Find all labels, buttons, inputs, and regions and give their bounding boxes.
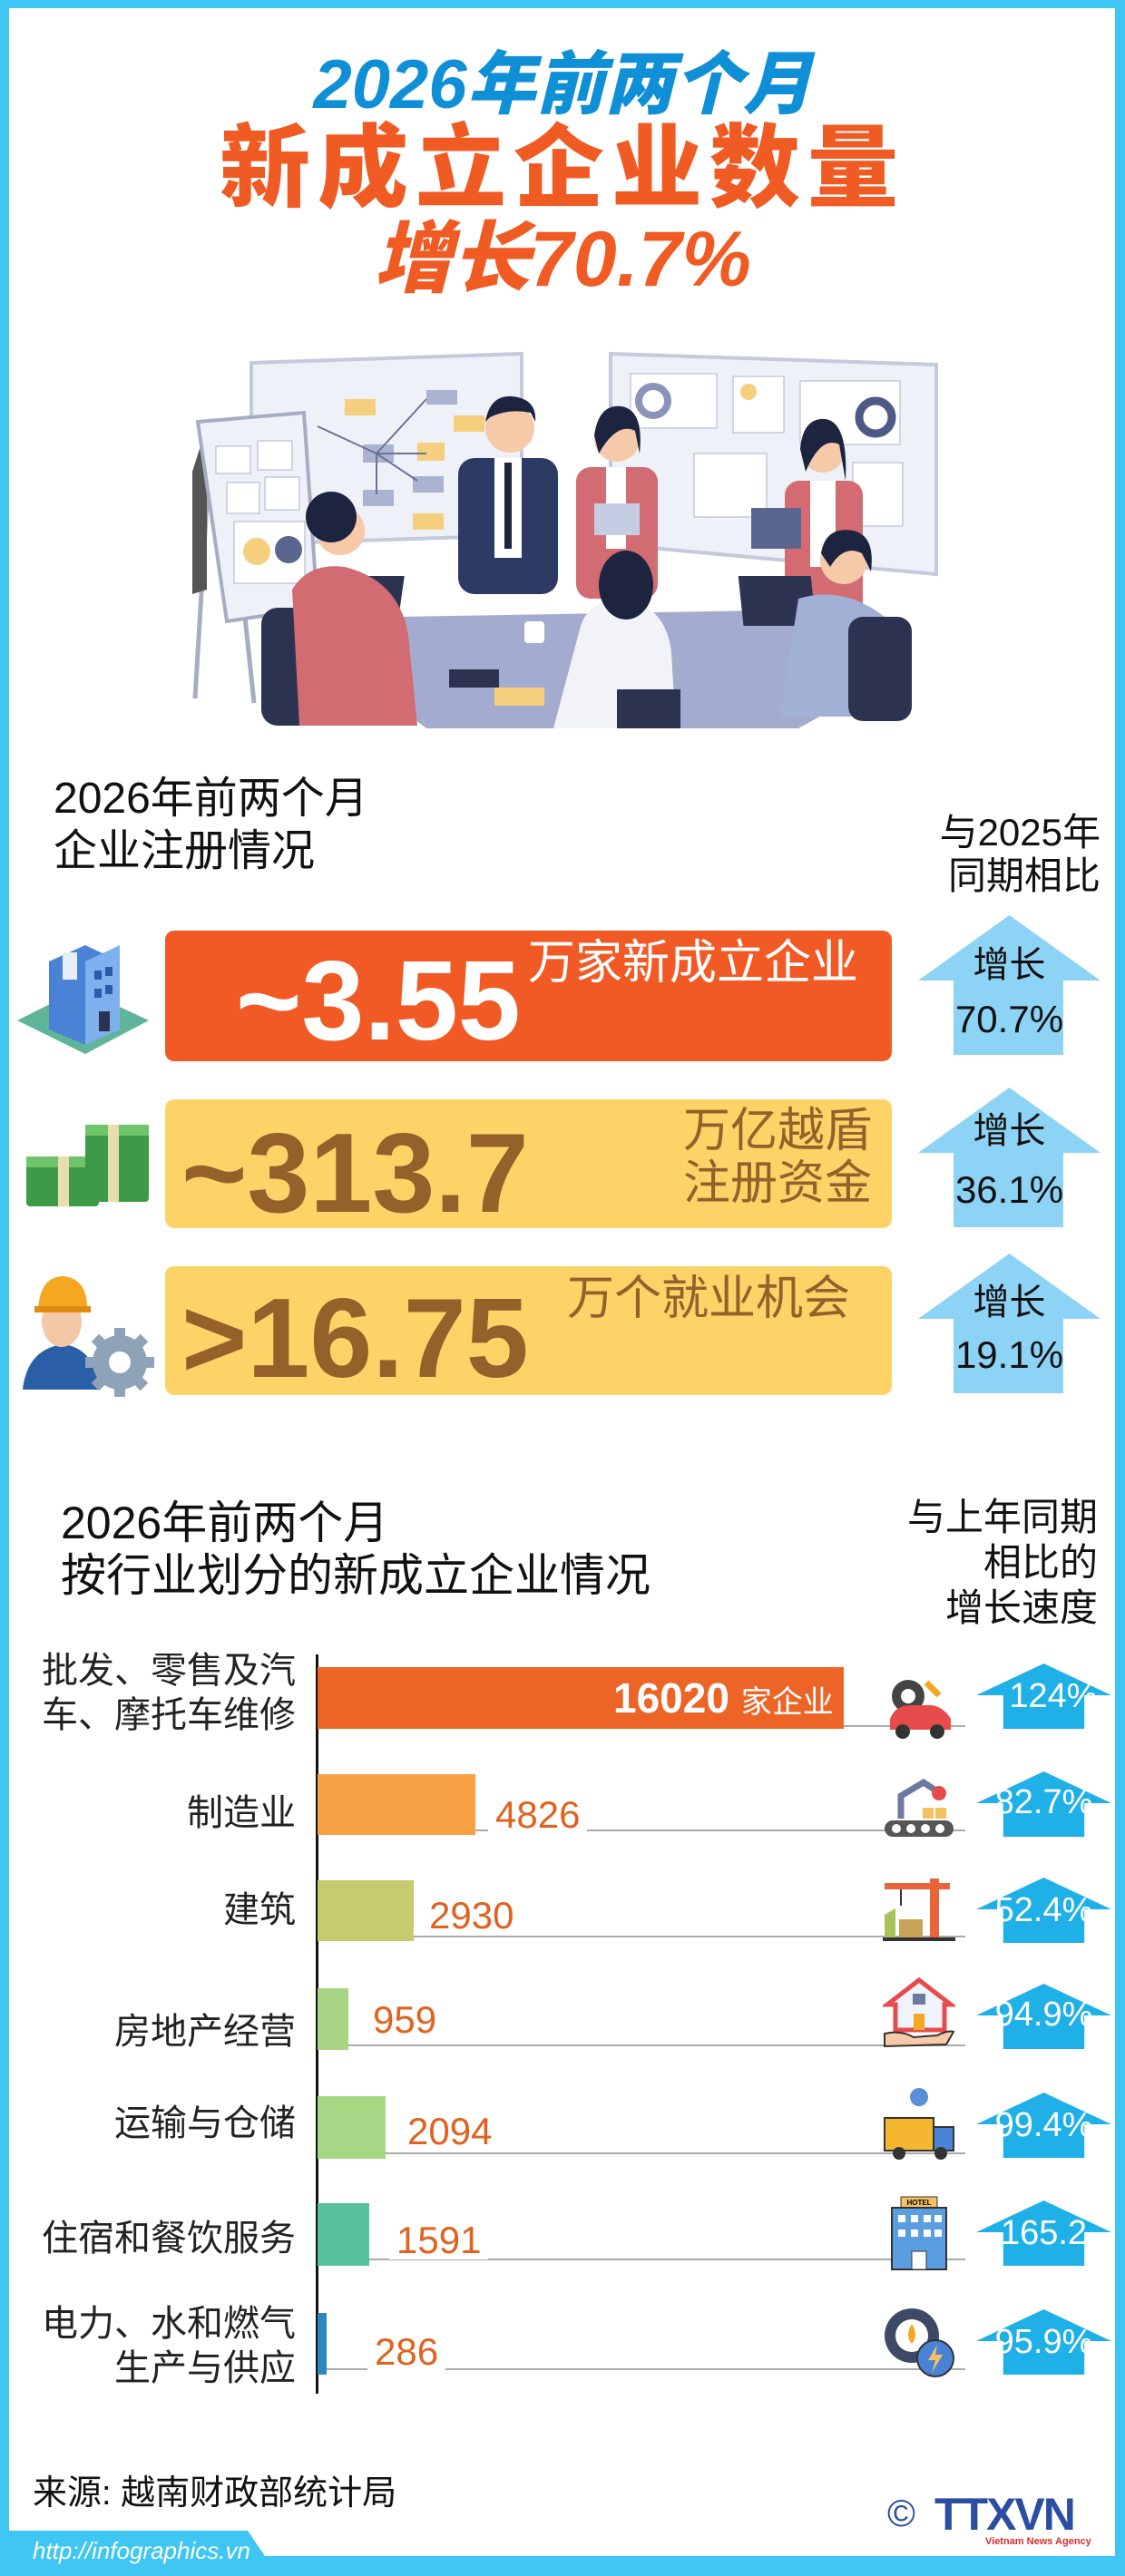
title: 增长70.7% <box>374 216 751 303</box>
growth speed header: 增长速度 <box>945 1586 1098 1629</box>
row: electricity <box>42 2304 445 2388</box>
stat bar: new enterprises: ~3.55 <box>236 939 521 1064</box>
section heading: by industry: 2026年前两个月 <box>61 1498 388 1548</box>
title <box>220 46 905 303</box>
arrow: growth 70.7%: 增长 <box>973 945 1045 985</box>
standing woman right <box>751 419 863 617</box>
seated people <box>261 492 912 728</box>
arrow 52.4% <box>976 1878 1111 1943</box>
icon: building <box>17 945 149 1054</box>
row: construction <box>223 1880 514 1941</box>
arrow: growth 19.1%: 增长 <box>973 1283 1045 1322</box>
row: accommodation: 住宿和餐饮服务 <box>42 2219 296 2259</box>
arrow 52.4%: 52.4% <box>995 1891 1092 1929</box>
source: 来源: 越南财政部统计局 <box>33 2474 396 2513</box>
title: 新成立企业数量 <box>220 118 905 220</box>
icon: delivery truck <box>884 2088 954 2160</box>
whiteboard left <box>251 354 522 544</box>
arrow 165.2: 165.2 <box>1001 2214 1087 2252</box>
row: transport <box>114 2096 492 2159</box>
arrow 82.7%: 82.7% <box>995 1783 1092 1821</box>
row: real estate: 房地产经营 <box>114 2012 296 2052</box>
arrow 99.4%: 99.4% <box>995 2106 1092 2144</box>
arrow 95.9%: 95.9% <box>995 2323 1092 2361</box>
standing woman center <box>576 406 658 599</box>
logo TTXVN: © <box>887 2492 915 2534</box>
compare header: 与2025年 <box>940 811 1101 854</box>
arrow 99.4% <box>976 2093 1111 2158</box>
icon: construction crane <box>883 1878 955 1941</box>
stat bar: capital: ~313.7 <box>181 1111 529 1236</box>
section heading: registration: 2026年前两个月 <box>54 775 368 823</box>
arrow 124%: 124% <box>1009 1677 1098 1715</box>
icon: hotel <box>891 2197 947 2270</box>
row: transport: 2094 <box>407 2110 492 2152</box>
section heading: by industry: 按行业划分的新成立企业情况 <box>61 1550 651 1601</box>
stat bar: new enterprises <box>165 931 892 1061</box>
arrow 95.9% <box>976 2309 1111 2375</box>
growth speed header: 与上年同期 <box>907 1496 1098 1538</box>
logo TTXVN: Vietnam News Agency <box>985 2536 1091 2547</box>
row: electricity: 电力、水和燃气 <box>42 2304 296 2344</box>
standing man <box>458 396 558 594</box>
row: manufacturing <box>187 1774 587 1836</box>
compare header: 同期相比 <box>948 854 1101 897</box>
stat bar: capital <box>165 1099 892 1228</box>
illustration: team meeting <box>192 352 938 728</box>
arrow: growth 19.1%: 19.1% <box>955 1333 1063 1376</box>
section heading: registration: 企业注册情况 <box>54 827 315 875</box>
flipchart <box>192 413 318 703</box>
table <box>325 576 894 728</box>
stat bar: jobs <box>165 1266 892 1395</box>
icon: robot arm <box>885 1778 954 1837</box>
row: wholesale & retail: 车、摩托车维修 <box>42 1695 296 1735</box>
row: accommodation: 1591 <box>396 2219 481 2261</box>
icon: hotel: HOTEL <box>906 2199 932 2207</box>
url: http://infographics.vn <box>33 2537 250 2564</box>
arrow 94.9% <box>976 1984 1111 2049</box>
stat bar: new enterprises: 万家新成立企业 <box>528 937 858 990</box>
row: wholesale & retail <box>42 1651 844 1735</box>
icon: worker with gear <box>23 1276 154 1397</box>
row: manufacturing: 制造业 <box>187 1793 296 1833</box>
stat bar: jobs: 万个就业机会 <box>567 1273 850 1325</box>
section heading: registration <box>54 775 368 875</box>
stat bar: capital: 万亿越盾 <box>683 1105 872 1157</box>
arrow: growth 36.1%: 36.1% <box>955 1168 1063 1211</box>
growth arrows column <box>976 1664 1111 2375</box>
title: 2026年前两个月 <box>313 46 812 123</box>
row: construction: 2930 <box>429 1894 514 1937</box>
row: wholesale & retail: 批发、零售及汽 <box>42 1651 296 1691</box>
arrow: growth 70.7%: 70.7% <box>955 998 1063 1040</box>
arrow: growth 19.1% <box>918 1254 1101 1393</box>
row: real estate: 959 <box>373 1998 436 2041</box>
growth speed header <box>907 1496 1098 1629</box>
row: manufacturing: 4826 <box>495 1793 580 1836</box>
arrow 124% <box>976 1664 1111 1729</box>
logo TTXVN: TTXVN <box>934 2489 1074 2540</box>
row: accommodation <box>42 2203 488 2266</box>
arrow 165.2 <box>976 2200 1111 2266</box>
stat bar: jobs: >16.75 <box>181 1276 529 1401</box>
row: wholesale & retail: 16020 家企业 <box>613 1674 834 1722</box>
whiteboard right <box>611 354 936 574</box>
arrow 82.7% <box>976 1771 1111 1837</box>
section heading: by industry <box>61 1498 651 1601</box>
icon: house in hand <box>883 1977 955 2047</box>
row: transport: 运输与仓储 <box>114 2103 296 2143</box>
row: electricity: 286 <box>375 2330 438 2373</box>
arrow 94.9%: 94.9% <box>995 1995 1092 2034</box>
icon: energy gear <box>885 2308 954 2377</box>
row: electricity: 生产与供应 <box>114 2348 296 2388</box>
icon: money <box>26 1125 149 1206</box>
growth speed header: 相比的 <box>983 1541 1098 1584</box>
icon: car repair <box>890 1680 951 1739</box>
stat bar: capital: 注册资金 <box>683 1157 872 1210</box>
url tab <box>9 2531 265 2556</box>
arrow: growth 70.7% <box>918 915 1101 1055</box>
row: real estate <box>114 1988 436 2052</box>
compare header <box>940 811 1101 897</box>
axis <box>316 1654 318 2394</box>
arrow: growth 36.1% <box>918 1088 1101 1227</box>
row: construction: 建筑 <box>223 1890 296 1930</box>
bar chart: industries <box>42 1651 965 2394</box>
arrow: growth 36.1%: 增长 <box>973 1111 1045 1151</box>
logo TTXVN <box>887 2489 1091 2547</box>
